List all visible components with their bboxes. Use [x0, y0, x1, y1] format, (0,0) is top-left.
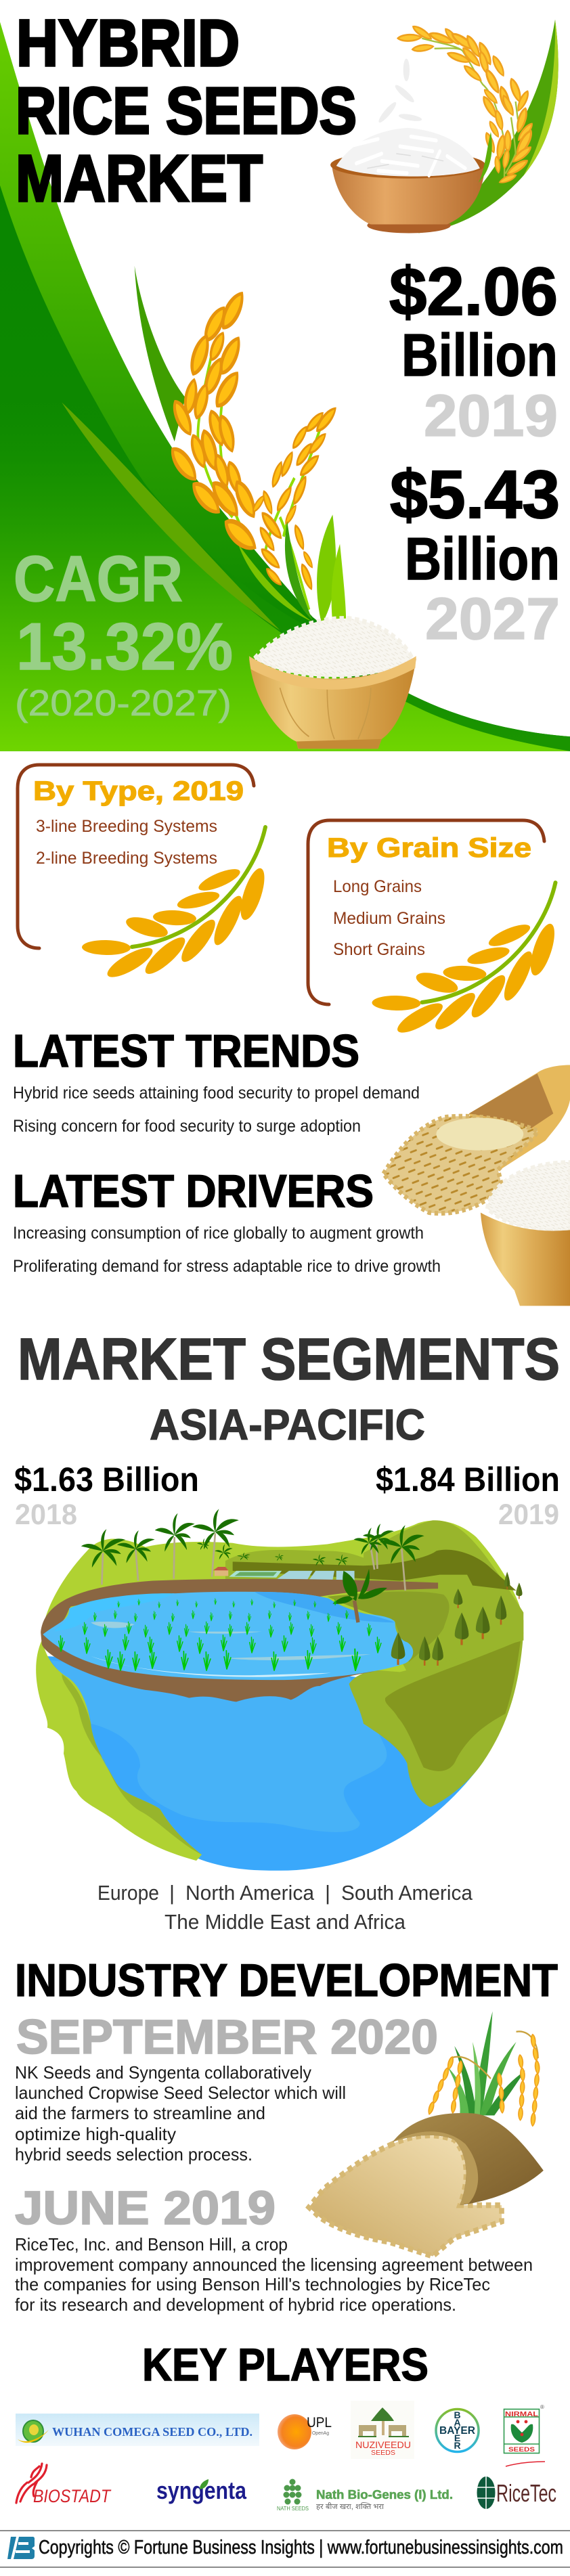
logo: syngenta: syngenta	[156, 2477, 247, 2504]
illustration: rice plant and wooden bowl	[135, 266, 416, 749]
panel: by type	[18, 765, 269, 982]
event: june 2019: RiceTec, Inc. and Benson Hill, a crop	[15, 2234, 288, 2255]
CAGR callout: CAGR	[14, 543, 183, 615]
hero background swoosh	[0, 22, 570, 751]
text block: trends: Hybrid rice seeds attaining food security to propel demand	[13, 1084, 420, 1103]
text block: drivers	[13, 1224, 441, 1276]
panel: by type: 3-line Breeding Systems	[36, 817, 217, 836]
stat: 2019 value: 2019	[498, 1498, 559, 1531]
text block: trends: Rising concern for food security to surge adoption	[13, 1117, 361, 1136]
stats: 2027 market value: $5.43	[390, 457, 560, 533]
logo: nath seeds: NATH SEEDS	[277, 2506, 309, 2512]
event: june 2019: improvement company announced the licensing agreement between	[15, 2255, 533, 2275]
heading: asia-pacific: ASIA-PACIFIC	[150, 1400, 425, 1449]
logo: upl: OpenAg	[312, 2431, 329, 2436]
illustration: rice bowl with wheat	[330, 20, 558, 233]
logo: biostadt: BIOSTADT	[33, 2486, 112, 2506]
heading: latest trends: LATEST TRENDS	[13, 1025, 359, 1077]
logo: bayer: B	[454, 2410, 461, 2420]
logo: biostadt	[16, 2464, 112, 2506]
heading: latest drivers: LATEST DRIVERS	[13, 1165, 374, 1217]
stats: 2019 market value: $2.06	[389, 254, 558, 330]
logo: bayer	[436, 2410, 479, 2451]
logo: nath seeds: Nath Bio-Genes (I) Ltd.	[316, 2488, 453, 2502]
event: september 2020: hybrid seeds selection process.	[15, 2144, 253, 2164]
stat: 2019 value: $1.84 Billion	[376, 1461, 560, 1498]
logo: nirmal seeds: NIRMAL	[505, 2411, 538, 2418]
panel: by grain size: By Grain Size	[327, 833, 531, 863]
logo: nuziveedu seeds: NUZIVEEDU	[355, 2439, 411, 2450]
logo: nuziveedu seeds	[351, 2401, 414, 2459]
event: september 2020: NK Seeds and Syngenta collaboratively	[15, 2062, 311, 2083]
logo: bayer: R	[454, 2440, 461, 2451]
logo: upl	[278, 2414, 332, 2449]
event: september 2020: launched Cropwise Seed Selector which will	[15, 2083, 346, 2103]
footer	[0, 2531, 570, 2567]
title: MARKET	[16, 141, 263, 215]
logo: bayer: BAYER	[439, 2425, 475, 2437]
stat: 2018 value: $1.63 Billion	[14, 1461, 199, 1498]
event: september 2020	[15, 2011, 438, 2164]
stat: 2019 value	[376, 1461, 560, 1531]
panel: by grain size: Medium Grains	[333, 909, 445, 928]
CAGR callout	[14, 543, 233, 724]
panel: by type: 2-line Breeding Systems	[36, 849, 217, 868]
logo: wuhan comega	[16, 2414, 259, 2446]
stats: 2019 market value: 2019	[424, 383, 558, 449]
text block: other regions: |	[325, 1881, 330, 1905]
illustration: scoop and bowl of rice	[384, 1065, 570, 1306]
text block: other regions	[97, 1881, 473, 1934]
title: RICE SEEDS	[16, 74, 357, 148]
logo: upl: UPL	[307, 2415, 332, 2430]
event: june 2019: for its research and development of hybrid rice operations.	[15, 2294, 456, 2315]
text block: other regions: South America	[341, 1881, 473, 1905]
panel: by type: By Type, 2019	[33, 776, 244, 806]
text block: other regions: North America	[185, 1881, 315, 1905]
text block: drivers: Proliferating demand for stress adaptable rice to drive growth	[13, 1257, 441, 1276]
stat: 2018 value: 2018	[15, 1498, 77, 1531]
logo: nath seeds: हर बीज खरा, शक्ति भरा	[316, 2502, 384, 2511]
event: june 2019: JUNE 2019	[15, 2181, 276, 2234]
event: june 2019	[15, 2181, 533, 2315]
logo: nuziveedu seeds: SEEDS	[371, 2449, 395, 2457]
logo: bayer: E	[454, 2433, 460, 2443]
logo: wuhan comega: WUHAN COMEGA SEED CO., LTD.	[52, 2425, 253, 2439]
text block: trends	[13, 1084, 420, 1136]
logo: nirmal seeds: ®	[540, 2404, 544, 2410]
stats: 2027 market value	[390, 457, 560, 652]
logo: bayer: A	[454, 2417, 461, 2428]
text block: other regions: The Middle East and Africa	[165, 1910, 406, 1934]
illustration: rice sack with plant	[309, 2012, 544, 2257]
title: HYBRID	[16, 6, 240, 80]
text block: other regions: Europe	[97, 1881, 159, 1905]
panel: by grain size	[308, 820, 559, 1038]
panel: by grain size: Long Grains	[333, 877, 422, 896]
logo: nirmal seeds: SEEDS	[508, 2446, 535, 2453]
text block: other regions: |	[169, 1881, 175, 1905]
illustration: globe with rice paddy	[36, 1509, 523, 1871]
logo: ricetec	[477, 2462, 556, 2509]
text block: drivers: Increasing consumption of rice globally to augment growth	[13, 1224, 424, 1243]
event: september 2020: optimize high-quality	[15, 2124, 176, 2144]
stats: 2019 market value	[389, 254, 558, 449]
logo: nath seeds	[277, 2479, 453, 2512]
event: september 2020: aid the farmers to streamline and	[15, 2103, 265, 2123]
event: june 2019: the companies for using Benson Hill's technologies by RiceTec	[15, 2274, 490, 2294]
CAGR callout: (2020-2027)	[15, 683, 232, 724]
panel: by grain size: Short Grains	[333, 940, 425, 959]
title	[16, 6, 357, 215]
heading: key players: KEY PLAYERS	[142, 2339, 429, 2391]
stat: 2018 value	[14, 1461, 199, 1531]
logo: nirmal seeds	[504, 2404, 544, 2453]
CAGR callout: 13.32%	[16, 609, 233, 684]
event: september 2020: SEPTEMBER 2020	[16, 2011, 438, 2064]
stats: 2027 market value: 2027	[425, 586, 560, 652]
